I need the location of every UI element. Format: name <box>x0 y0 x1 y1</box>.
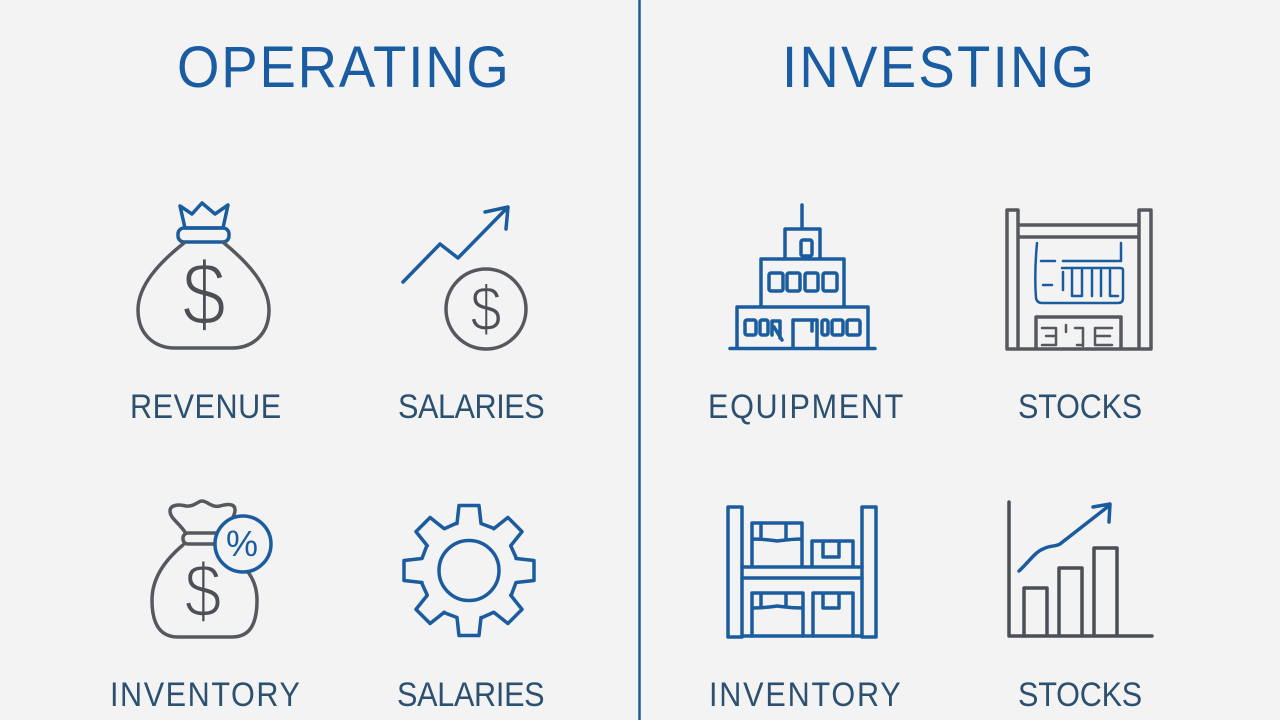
icon: equipment building <box>730 205 875 348</box>
label: stocks: STOCKS <box>1018 388 1142 425</box>
label: salaries second: SALARIES <box>397 676 545 713</box>
label: inventory: INVENTORY <box>110 676 300 713</box>
icon: stocks bar chart <box>1009 502 1152 636</box>
label: equipment: EQUIPMENT <box>708 388 903 425</box>
icon: salaries arrow and coin: $ <box>471 273 501 345</box>
label: revenue: REVENUE <box>130 388 281 425</box>
icon: inventory money bag with percent: % <box>226 523 258 564</box>
icon: revenue money bag <box>138 203 269 348</box>
icon: gear <box>404 506 534 636</box>
label: salaries: SALARIES <box>398 388 545 425</box>
heading: investing: INVESTING <box>782 34 1094 99</box>
panel: investing <box>708 205 1152 713</box>
icon: inventory money bag with percent <box>152 501 271 637</box>
icon: stocks board <box>1007 210 1151 349</box>
panel: operating <box>110 203 545 713</box>
icon: salaries arrow and coin <box>403 207 526 349</box>
icon: revenue money bag: $ <box>182 244 226 344</box>
icon: inventory money bag with percent: $ <box>185 550 221 634</box>
heading: operating: OPERATING <box>177 34 509 99</box>
label: stocks: STOCKS <box>1018 676 1142 713</box>
label: inventory: INVENTORY <box>709 676 901 713</box>
icon: inventory warehouse shelf <box>728 507 876 637</box>
